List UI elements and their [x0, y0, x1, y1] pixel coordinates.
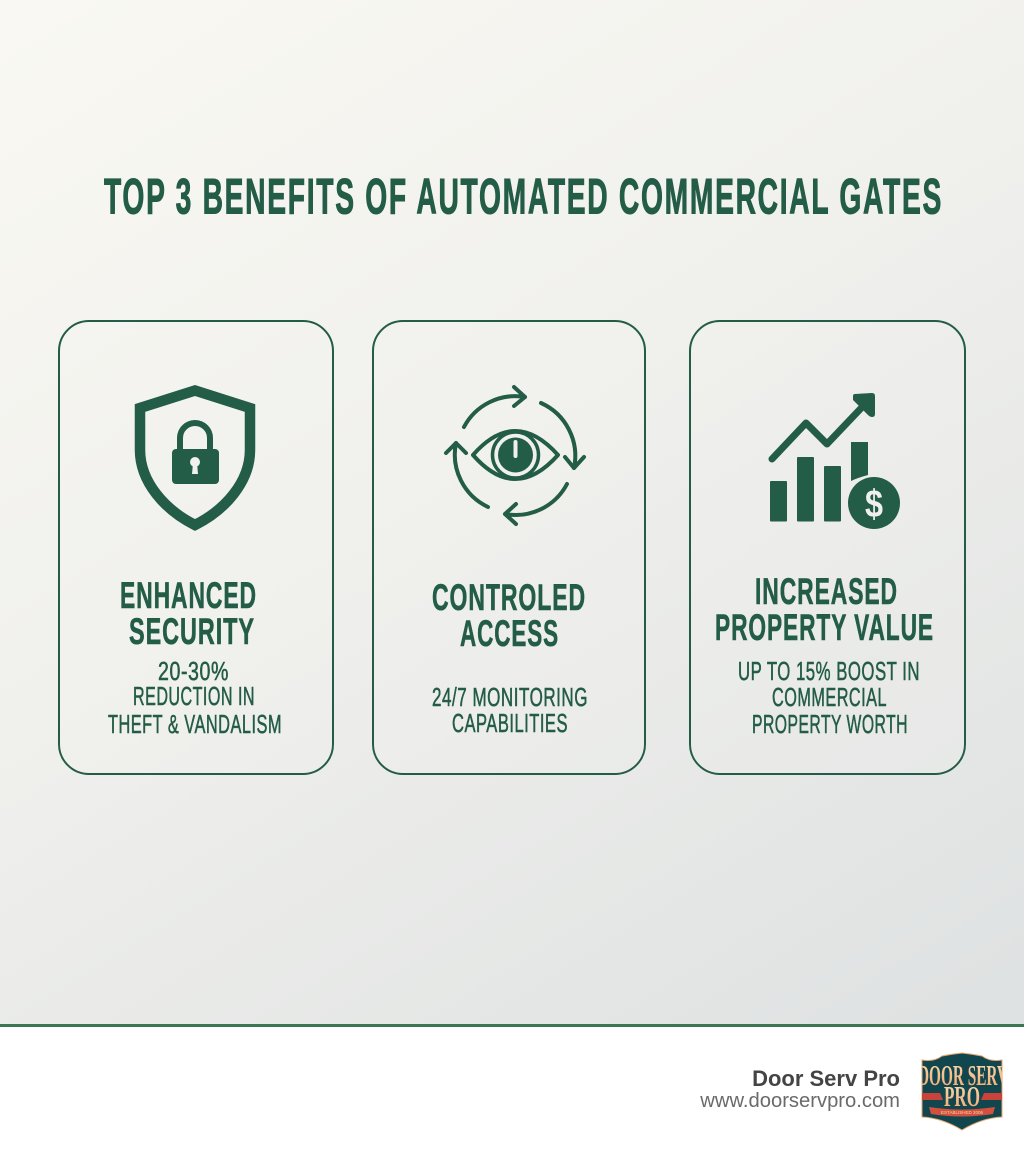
icon: rising chart with dollar coin: $ — [865, 483, 883, 526]
heading: controled access: ACCESS — [460, 613, 559, 654]
footer background — [0, 1024, 1024, 1154]
card outline — [690, 321, 965, 774]
brand name: Door Serv Pro — [752, 1066, 900, 1091]
text: security statistic — [108, 656, 282, 739]
footer — [0, 1024, 1024, 1130]
panel: increased property value — [690, 321, 965, 774]
heading: controled access: CONTROLED — [432, 577, 586, 618]
heading: increased property value: INCREASED — [755, 571, 898, 612]
text: property value statistic — [738, 656, 920, 739]
logo: door serv pro badge: ESTABLISHED 2006 — [941, 1110, 983, 1115]
text: security statistic: THEFT & VANDALISM — [108, 709, 282, 739]
icon: shield with padlock — [140, 390, 250, 525]
footer rule — [0, 1024, 1024, 1027]
icon: eye with circular arrows — [446, 387, 584, 524]
card outline — [373, 321, 645, 774]
text: security statistic: REDUCTION IN — [133, 681, 255, 711]
panel: enhanced security — [59, 321, 333, 774]
website: www.doorservpro.com — [699, 1090, 900, 1112]
heading: increased property value — [715, 571, 934, 648]
heading: controled access — [432, 577, 586, 654]
logo: door serv pro badge — [918, 1053, 1008, 1130]
card outline — [59, 321, 333, 774]
text: monitoring capabilities: 24/7 MONITORING — [432, 682, 588, 712]
text: security statistic: 20-30% — [158, 656, 229, 686]
icon: rising chart with dollar coin — [770, 393, 900, 529]
text: property value statistic: UP TO 15% BOOST IN — [738, 656, 920, 686]
logo: door serv pro badge: PRO — [944, 1082, 980, 1113]
panel: controlled access — [373, 321, 645, 774]
text: monitoring capabilities: CAPABILITIES — [452, 708, 568, 738]
heading: enhanced security: SECURITY — [129, 611, 255, 652]
text: property value statistic: COMMERCIAL — [772, 682, 887, 712]
heading: enhanced security — [120, 575, 257, 652]
text: property value statistic: PROPERTY WORTH — [752, 709, 908, 739]
text: monitoring capabilities — [432, 682, 588, 738]
heading: enhanced security: ENHANCED — [120, 575, 257, 616]
